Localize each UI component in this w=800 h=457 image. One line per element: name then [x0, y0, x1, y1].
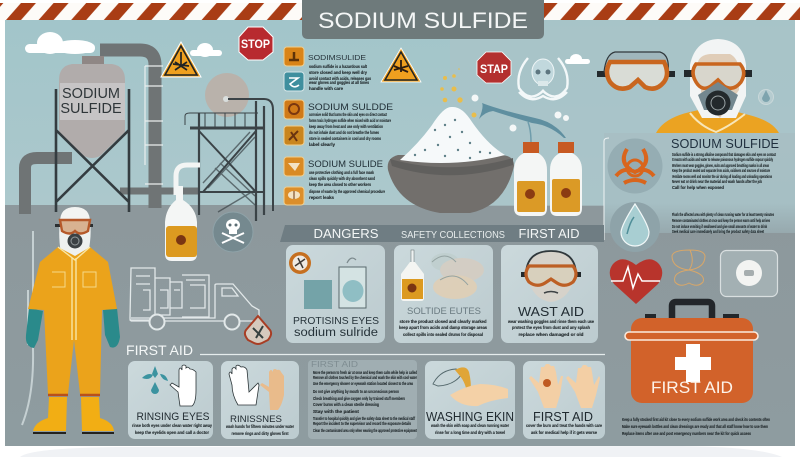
- illustration: powder in bowl: [388, 68, 514, 213]
- illustration: spray bottle: [165, 165, 200, 261]
- text: first aid body: Check breathing and give oxygen only by trained staff members: [313, 396, 405, 401]
- text: first aid body: Stay with the patient: [313, 409, 360, 414]
- text: first aid body: Remove all clothes touched by the chemical and wash the skin with cool water: [313, 375, 417, 380]
- text: card body: [507, 319, 594, 337]
- icon: bare hand: [260, 369, 284, 410]
- text: protects eyes label: [293, 315, 379, 339]
- text: card body: rinse for a long time and dry with a towel: [435, 430, 505, 435]
- text: card body: keep the eyelids open and call a doctor: [135, 430, 209, 435]
- text: note 3 body: dispose of waste by the approved chemical procedure: [309, 189, 385, 194]
- illustration: spilled crystals: [431, 253, 484, 299]
- illustration: masked person: [656, 39, 779, 133]
- text: note 3 body: use protective clothing and a full face mask: [309, 170, 374, 175]
- icon: wound dressing square: [720, 250, 778, 296]
- text: note 2 body: forms toxic hydrogen sulfide when mixed with acid or moisture: [309, 118, 391, 123]
- icon: stop sign: STOP: [241, 39, 270, 51]
- illustration: protective suit worker: [22, 207, 120, 433]
- icon: skull and crossbones badge: [213, 212, 253, 252]
- text: card body: ask for medical help if it gets worse: [531, 430, 597, 435]
- icon: orange badge 1: [284, 47, 304, 66]
- icon: dropper bottle: [401, 250, 424, 301]
- text: card body: keep apart from acids and damp storage areas: [399, 325, 488, 330]
- icon: teal badge: [284, 72, 304, 91]
- icon: orange badge 3: [284, 126, 304, 145]
- text: note 1 body: handle with care: [309, 86, 344, 91]
- title: SODIUM SULFIDE: [318, 8, 528, 33]
- text: right panel body: [672, 152, 776, 190]
- text: first aid body: [313, 370, 417, 433]
- text: note 2 body: store in sealed containers in cool and dry rooms: [309, 136, 381, 141]
- icon: water drop badge: [610, 202, 660, 252]
- text: card body: protect the eyes from dust and any splash: [512, 325, 590, 330]
- card: first aid hands: [523, 361, 605, 439]
- gloves: [26, 308, 120, 348]
- icon: stop sign: [239, 27, 273, 60]
- text: card body: [225, 424, 294, 436]
- text: note 3 body: report leaks: [309, 195, 335, 200]
- text: first aid body: Clean the contaminated area only when wearing the approved protective equipment: [313, 428, 417, 433]
- icon: orange badge 2: [284, 100, 304, 119]
- text: card body: cover the burn and treat the hands with care: [526, 423, 602, 428]
- text: first aid body: Do not give anything by mouth to an unconscious person: [313, 389, 399, 394]
- icon: rinse container: [339, 258, 366, 308]
- hazard stripe band: [0, 3, 800, 20]
- text: note 3 body: keep the area closed to other workers: [309, 182, 371, 187]
- icon list: sodium sulfide notes: [284, 47, 393, 205]
- text: note 2 body: [309, 112, 391, 147]
- heading: right panel: SODIUM SULFIDE: [671, 136, 779, 151]
- suit: [28, 247, 117, 394]
- text: card body: [132, 423, 212, 435]
- icon: stap sign: [477, 52, 511, 83]
- text: card body: [526, 423, 602, 435]
- text: note 1 body: sodium sulfide is a hazardous salt: [309, 64, 367, 69]
- text: protects eyes label: sodium sulride: [294, 327, 378, 339]
- text: first aid body: Transfer to hospital quickly and give the safety data sheet to the medical staff: [313, 416, 415, 421]
- text: kit label: FIRST AID: [651, 379, 733, 397]
- illustration: scaffold with tank: [185, 73, 273, 221]
- text: card body: wear washing goggles and rinse them each use: [507, 319, 594, 324]
- heading: faded first aid: FIRST AID: [311, 360, 358, 369]
- text: first aid body: Report the incident to the supervisor and record the exposure details: [313, 421, 411, 426]
- helmet and mask: [55, 207, 93, 262]
- safety rod: [22, 231, 33, 425]
- illustration: sodium sulfide silo: [56, 56, 129, 212]
- icon: white glove: [229, 365, 259, 405]
- card: safety collections: [394, 245, 493, 343]
- icon: hazard diamond: [245, 316, 271, 344]
- text: kit caption: [622, 417, 770, 436]
- icon: small droplet badge: [758, 90, 774, 104]
- heading: first aid section: FIRST AID: [126, 342, 193, 358]
- icon: hand under pouring liquid: [433, 367, 508, 406]
- text: note 2 body: do not inhale dust and do not breathe the fumes: [309, 130, 379, 135]
- arrow: teal flow to bottles: [472, 94, 569, 142]
- text: first aid body: Move the person to fresh air at once and keep them calm while help is called: [313, 370, 417, 375]
- icon: water drops: [142, 366, 168, 394]
- text: protects eyes label: PROTISINS EYES: [293, 315, 379, 327]
- illustration: two chemical bottles: [514, 142, 582, 216]
- text: card body: wash hands for fifteen minutes under water: [225, 424, 294, 429]
- panel: first aid text block: [308, 360, 417, 439]
- powder particles: [440, 68, 476, 118]
- illustration: face with goggles: [521, 251, 581, 302]
- section header band: [280, 225, 604, 242]
- text: note 2 body: label clearly: [309, 142, 336, 147]
- teal sample square: [304, 280, 332, 309]
- card: washing skin: [425, 361, 515, 439]
- card: dangers: [286, 245, 385, 343]
- text: first aid body: Use the emergency shower or eyewash station located closest to the area: [313, 381, 413, 386]
- text: rinissnes label: RINISSNES: [230, 414, 282, 425]
- icon: first aid kit: [625, 302, 758, 403]
- card: rinsing hands: [221, 361, 299, 439]
- icon: warning triangle: [161, 42, 201, 77]
- text: card body: wash the skin with soap and clean running water: [430, 423, 509, 428]
- illustration: pipes: [25, 50, 200, 214]
- icon: white glove: [170, 365, 196, 406]
- boots: [33, 397, 114, 431]
- illustration: safety goggles: [597, 52, 675, 89]
- text: first aid body: Cover burns with a clean sterile dressing: [313, 402, 379, 407]
- icon: left hand with burn: [529, 364, 563, 408]
- icon: clouds: [25, 32, 590, 64]
- text: card body: [430, 423, 509, 435]
- heading: dangers: DANGERS: [314, 226, 379, 241]
- icon: orange badge 4: [284, 157, 304, 176]
- icon: warning triangle 2: [381, 48, 421, 82]
- illustration: sodium sulfide silo: SULFIDE: [60, 101, 122, 117]
- text: note 2 body: keep away from heat and use only with ventilation: [309, 124, 383, 129]
- heading: note 1: SODIMSULIDE: [308, 53, 366, 62]
- text: sulfide note: SOLTIDE EUTES: [407, 306, 481, 317]
- panel: right sodium sulfide details: [604, 133, 795, 252]
- illustration: transport truck: [130, 268, 259, 330]
- icon: stap sign: STAP: [480, 64, 508, 76]
- text: rinsing eyes label: RINSING EYES: [136, 411, 210, 423]
- text: card body: collect spills into sealed drums for disposal: [403, 332, 483, 337]
- text: card body: remove rings and dirty gloves first: [232, 431, 289, 436]
- text: washing skin label: WASHING EKIN: [426, 409, 514, 424]
- text: first aid label: FIRST AID: [533, 410, 593, 424]
- text: note 1 body: wear gloves and goggles at all times: [308, 80, 369, 85]
- text: note 1 body: avoid contact with acids, releases gas: [309, 76, 371, 81]
- text: kit caption: Replace items after use and post emergency numbers near the kit for quick access: [622, 431, 751, 436]
- text: note 1 body: store closed and keep well dry: [309, 70, 367, 75]
- text: right panel body: Call for help when exposed: [672, 185, 724, 190]
- text: card body: store the product closed and clearly marked: [400, 319, 487, 324]
- text: note 3 body: [309, 170, 385, 200]
- heading: first aid: FIRST AID: [518, 226, 580, 241]
- card: rinsing eyes: [128, 361, 213, 439]
- icon: heart with pulse: [610, 259, 662, 304]
- icon: biohazard skull: [518, 58, 568, 99]
- text: water note: [672, 212, 774, 234]
- text: wast aid label: WAST AID: [518, 304, 584, 319]
- text: card body: [399, 319, 488, 337]
- icon: biohazard badge: [608, 138, 662, 194]
- heading: safety collections: SAFETY COLLECTIONS: [401, 230, 505, 241]
- title: [302, 0, 544, 39]
- text: note 3 body: clean spills quickly with dry absorbent sand: [309, 176, 375, 181]
- text: card body: replace when damaged or old: [518, 332, 584, 337]
- text: note 1 body: [308, 64, 371, 91]
- icon: orange badge 5: [284, 187, 304, 205]
- heading: note 2: SODIUM SULDDE: [308, 102, 393, 113]
- icon: pale orange organ outline: [672, 250, 705, 285]
- text: note 2 body: corrosive solid that burns the skin and eyes on direct contact: [309, 112, 387, 117]
- text: card body: rinse both eyes under clean water right away: [132, 423, 212, 428]
- heading: note 3: SODIUM SULIDE: [308, 159, 383, 170]
- icon: orange hazard dot: [289, 252, 311, 274]
- icon: right hand: [566, 365, 600, 408]
- card: goggles first aid: [501, 245, 598, 343]
- illustration: sodium sulfide silo: SODIUM: [62, 86, 120, 102]
